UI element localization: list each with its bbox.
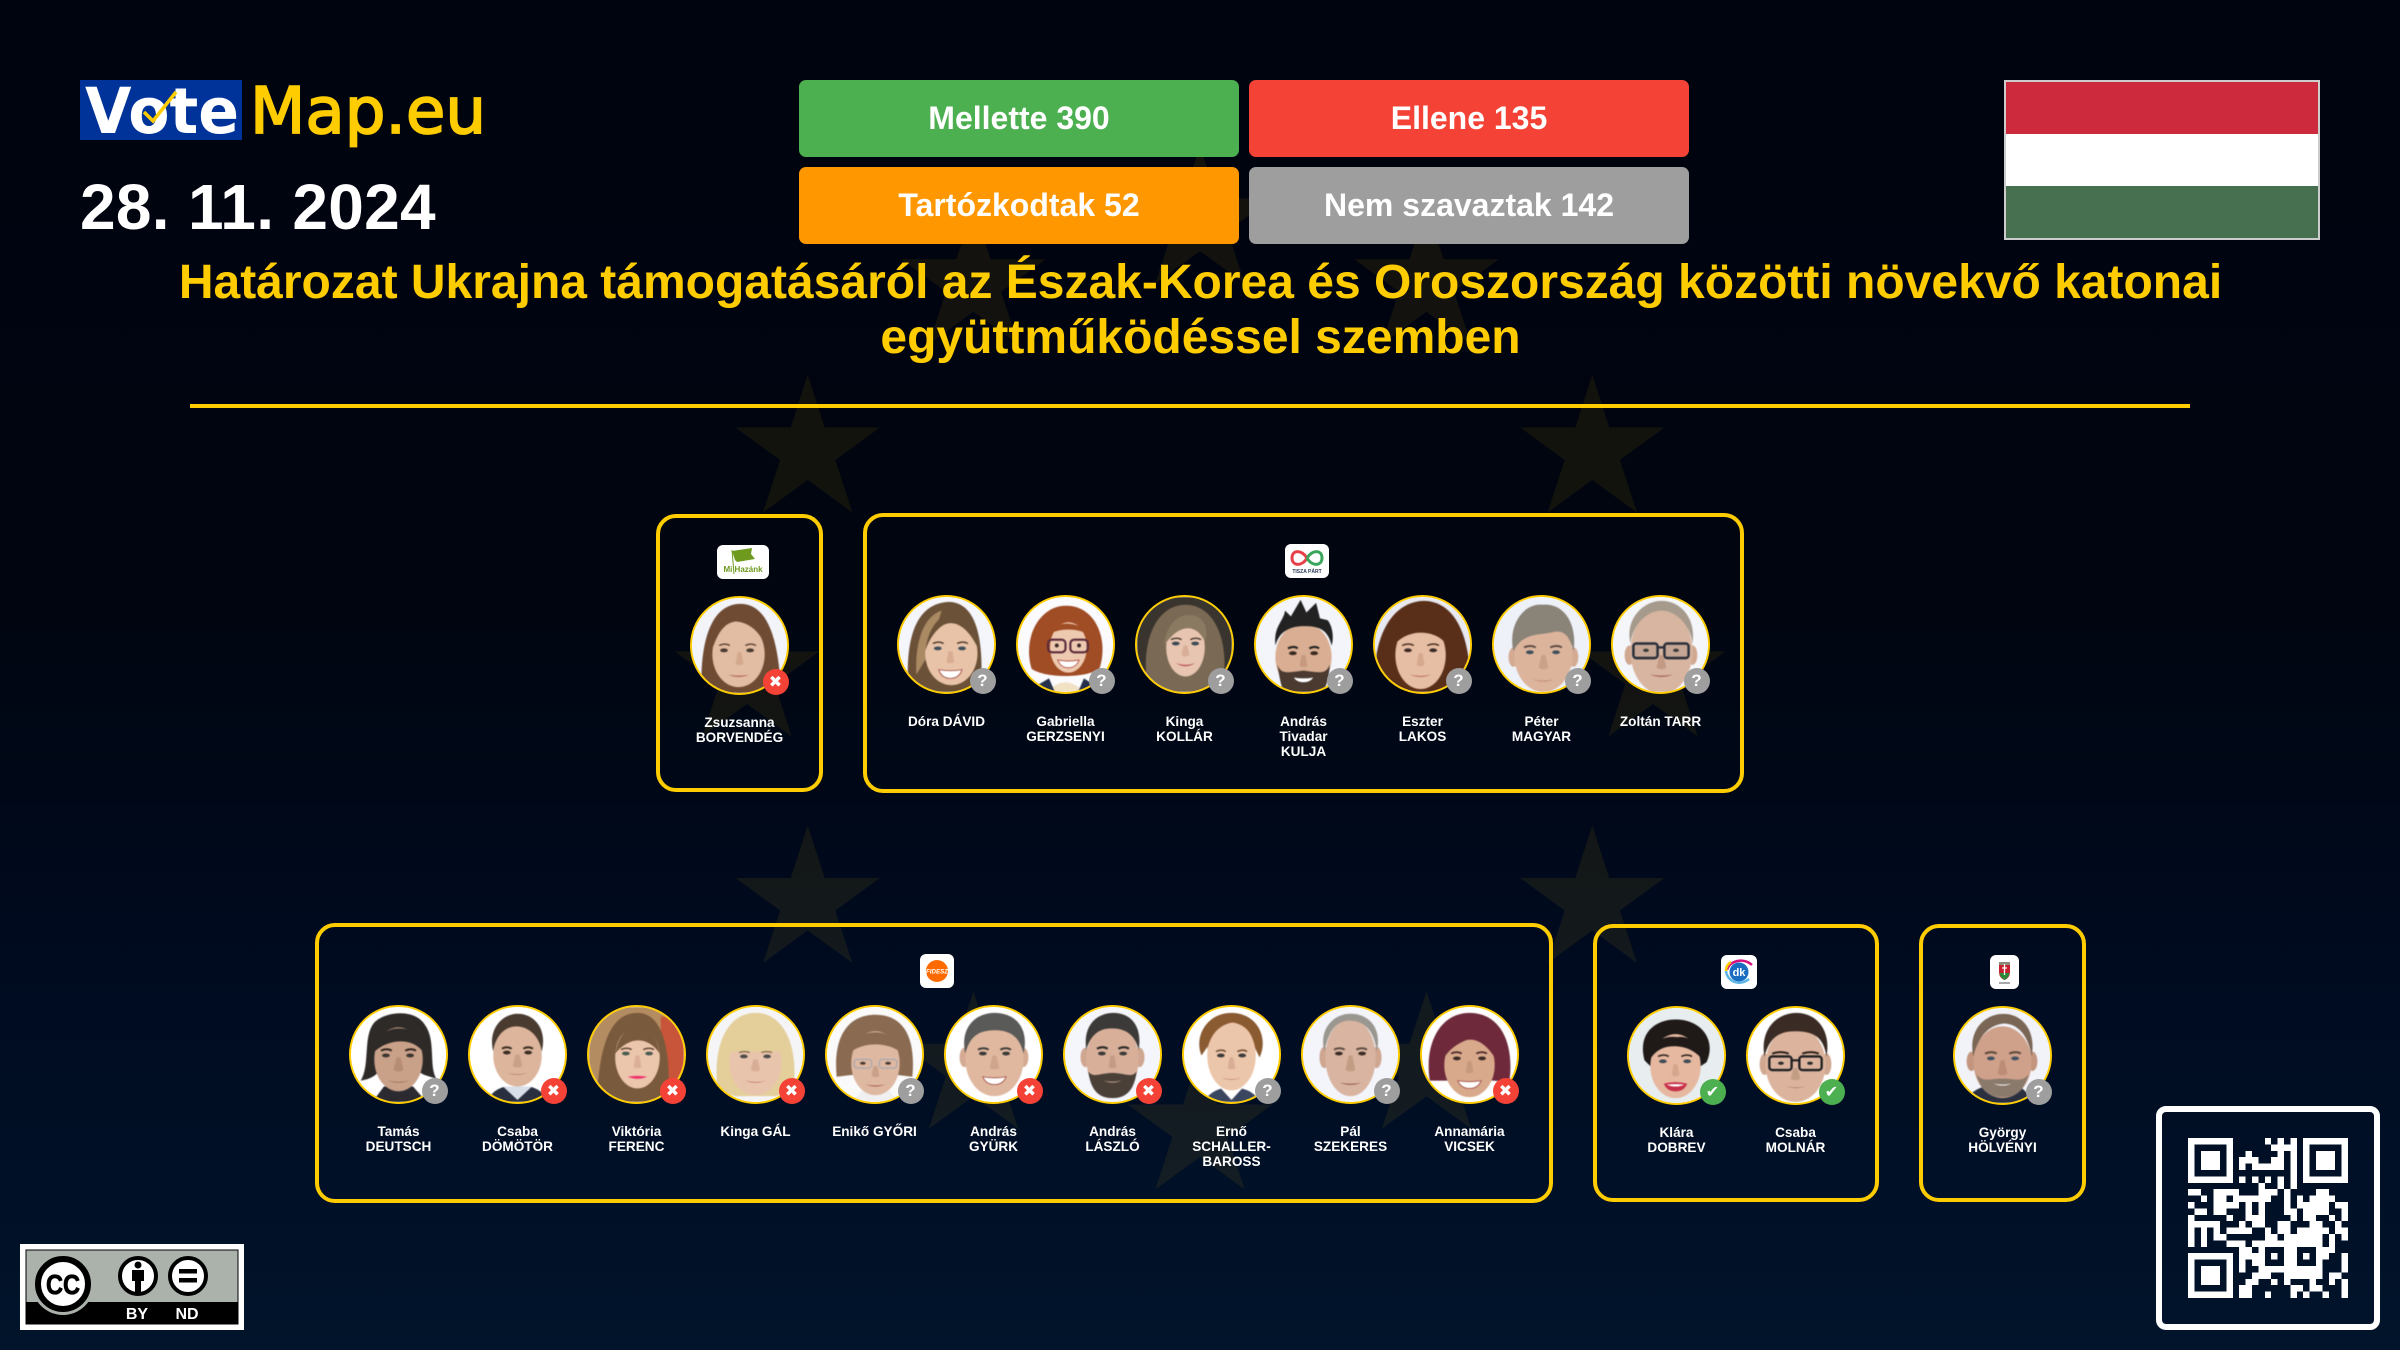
- member: Csaba Dömötör: [468, 1005, 567, 1154]
- member: Zsuzsanna Borvendég: [690, 596, 789, 745]
- member: Csaba Dömötör: ✖: [547, 1080, 560, 1100]
- vote count: not voted: [1249, 167, 1689, 244]
- member: Viktória Ferenc: FERENC: [609, 1139, 664, 1154]
- member: Péter Magyar: [1492, 595, 1591, 744]
- member: Enikő Győri: [825, 1005, 924, 1139]
- member: András Gyürk: András: [970, 1124, 1017, 1139]
- title: [179, 255, 2222, 364]
- member: Kinga Gál: [706, 1005, 805, 1139]
- vote count: abstain: Tartózkodtak 52: [898, 187, 1140, 223]
- member: Csaba Molnár: [1746, 1006, 1845, 1155]
- title: Határozat Ukrajna támogatásáról az Észak-Korea és Oroszország közötti növekvő katonai: [179, 256, 2222, 309]
- logo: VoteMap.eu: [80, 80, 486, 149]
- member: Tamás Deutsch: DEUTSCH: [366, 1139, 431, 1154]
- member: Viktória Ferenc: [587, 1005, 686, 1154]
- vote count: not voted: Nem szavaztak 142: [1324, 187, 1614, 223]
- QR code: [2156, 1106, 2380, 1330]
- member: Eszter Lakos: LAKOS: [1399, 729, 1446, 744]
- member: Dóra Dávid: Dóra DÁVID: [908, 714, 985, 729]
- member: György Hölvényi: [1953, 1006, 2052, 1155]
- member: Viktória Ferenc: Viktória: [612, 1124, 661, 1139]
- panel: Fidesz: [315, 923, 1553, 1203]
- member: Zsuzsanna Borvendég: ✖: [769, 672, 782, 690]
- member: Klára Dobrev: [1627, 1006, 1726, 1155]
- member: Zsuzsanna Borvendég: Zsuzsanna: [704, 715, 775, 730]
- member: András László: András: [1089, 1124, 1136, 1139]
- member: Csaba Molnár: MOLNÁR: [1766, 1140, 1825, 1155]
- party logo: Tisza: [1285, 544, 1329, 578]
- member: Kinga Kollár: Kinga: [1166, 714, 1203, 729]
- member: Zoltán Tarr: Zoltán TARR: [1620, 714, 1701, 729]
- member: Ernő Schaller-Baross: SCHALLER-: [1192, 1139, 1271, 1154]
- member: Gabriella Gerzsenyi: [1016, 595, 1115, 744]
- member: Tamás Deutsch: Tamás: [377, 1124, 420, 1139]
- party logo: Fidesz: [920, 954, 954, 988]
- member: Gabriella Gerzsenyi: Gabriella: [1036, 714, 1095, 729]
- flag of Hungary: [2004, 80, 2320, 240]
- member: Gabriella Gerzsenyi: GERZSENYI: [1026, 729, 1105, 744]
- party logo: Mi Hazánk: [717, 545, 769, 579]
- member: Dóra Dávid: ?: [977, 670, 988, 690]
- member: Enikő Győri: ?: [905, 1080, 916, 1100]
- member: Klára Dobrev: Klára: [1659, 1125, 1694, 1140]
- member: György Hölvényi: ?: [2033, 1082, 2044, 1100]
- member: Viktória Ferenc: ✖: [666, 1080, 679, 1100]
- member: András László: LÁSZLÓ: [1085, 1139, 1140, 1154]
- member: András László: ✖: [1142, 1080, 1155, 1100]
- member: Csaba Dömötör: Csaba: [497, 1124, 538, 1139]
- member: Pál Szekeres: Pál: [1340, 1124, 1361, 1139]
- member: György Hölvényi: HÖLVÉNYI: [1968, 1140, 2037, 1155]
- member: Ernő Schaller-Baross: [1182, 1005, 1281, 1169]
- panel: DK: [1593, 924, 1879, 1202]
- member: Csaba Molnár: ✔: [1825, 1082, 1838, 1100]
- member: Kinga Gál: Kinga GÁL: [720, 1124, 791, 1139]
- panel: Mi Hazánk: [656, 514, 823, 792]
- member: Zsuzsanna Borvendég: BORVENDÉG: [696, 730, 783, 745]
- member: Eszter Lakos: ?: [1453, 670, 1464, 690]
- member: Zoltán Tarr: [1611, 595, 1710, 729]
- member: Annamária Vicsek: Annamária: [1434, 1124, 1505, 1139]
- member: András Tivadar Kulja: [1254, 595, 1353, 759]
- license badge: CC BY-ND: CC: [46, 1269, 80, 1300]
- member: András Tivadar Kulja: ?: [1334, 670, 1345, 690]
- member: András Tivadar Kulja: KULJA: [1281, 744, 1326, 759]
- vote count: for: [799, 80, 1239, 157]
- member: Péter Magyar: ?: [1572, 670, 1583, 690]
- vote count: for: Mellette 390: [928, 100, 1110, 136]
- party logo: Tisza: TISZA PÁRT: [1292, 568, 1322, 575]
- member: Péter Magyar: Péter: [1524, 714, 1558, 729]
- member: Pál Szekeres: [1301, 1005, 1400, 1154]
- member: Ernő Schaller-Baross: Ernő: [1216, 1124, 1247, 1139]
- member: György Hölvényi: György: [1979, 1125, 2026, 1140]
- vote count: abstain: [799, 167, 1239, 244]
- member: András Gyürk: GYÜRK: [969, 1139, 1018, 1154]
- panel: Tisza Párt: [863, 513, 1744, 793]
- member: Csaba Molnár: Csaba: [1775, 1125, 1816, 1140]
- member: András László: [1063, 1005, 1162, 1154]
- member: András Gyürk: ✖: [1023, 1080, 1036, 1100]
- member: Pál Szekeres: ?: [1381, 1080, 1392, 1100]
- member: Enikő Győri: Enikő GYŐRI: [832, 1124, 917, 1139]
- party logo: DK: [1721, 955, 1757, 989]
- member: Tamás Deutsch: ?: [429, 1080, 440, 1100]
- member: Dóra Dávid: [897, 595, 996, 729]
- member: Kinga Kollár: ?: [1215, 670, 1226, 690]
- vote count: against: [1249, 80, 1689, 157]
- title: együttműködéssel szemben: [880, 311, 1521, 364]
- panel: independent: [1919, 924, 2086, 1202]
- member: Annamária Vicsek: VICSEK: [1444, 1139, 1495, 1154]
- member: Gabriella Gerzsenyi: ?: [1096, 670, 1107, 690]
- party logo: Fidesz: FIDESZ: [926, 968, 948, 976]
- member: Pál Szekeres: SZEKERES: [1314, 1139, 1387, 1154]
- member: Ernő Schaller-Baross: BAROSS: [1202, 1154, 1261, 1169]
- member: Eszter Lakos: Eszter: [1402, 714, 1443, 729]
- vote date: 28. 11. 2024: [80, 171, 436, 243]
- member: Kinga Kollár: [1135, 595, 1234, 744]
- member: Csaba Dömötör: DÖMÖTÖR: [482, 1139, 553, 1154]
- member: Annamária Vicsek: ✖: [1499, 1080, 1512, 1100]
- member: Eszter Lakos: [1373, 595, 1472, 744]
- member: Klára Dobrev: ✔: [1706, 1082, 1719, 1100]
- party logo: coat of arms: [1990, 955, 2019, 989]
- member: Kinga Gál: ✖: [785, 1080, 798, 1100]
- license badge: CC BY-ND: ND: [175, 1306, 199, 1323]
- member: Ernő Schaller-Baross: ?: [1262, 1080, 1273, 1100]
- license badge: CC BY-ND: [20, 1244, 244, 1330]
- member: Klára Dobrev: DOBREV: [1647, 1140, 1706, 1155]
- member: Annamária Vicsek: [1420, 1005, 1519, 1154]
- party logo: Mi Hazánk: Mi Hazánk: [723, 565, 763, 574]
- member: András Tivadar Kulja: Tivadar: [1279, 729, 1328, 744]
- license badge: CC BY-ND: BY: [126, 1306, 148, 1323]
- member: András Tivadar Kulja: András: [1280, 714, 1327, 729]
- member: András Gyürk: [944, 1005, 1043, 1154]
- member: Kinga Kollár: KOLLÁR: [1156, 729, 1213, 744]
- party logo: DK: dk: [1733, 967, 1746, 979]
- vote count: against: Ellene 135: [1391, 100, 1547, 136]
- member: Zoltán Tarr: ?: [1691, 670, 1702, 690]
- member: Péter Magyar: MAGYAR: [1512, 729, 1571, 744]
- member: Tamás Deutsch: [349, 1005, 448, 1154]
